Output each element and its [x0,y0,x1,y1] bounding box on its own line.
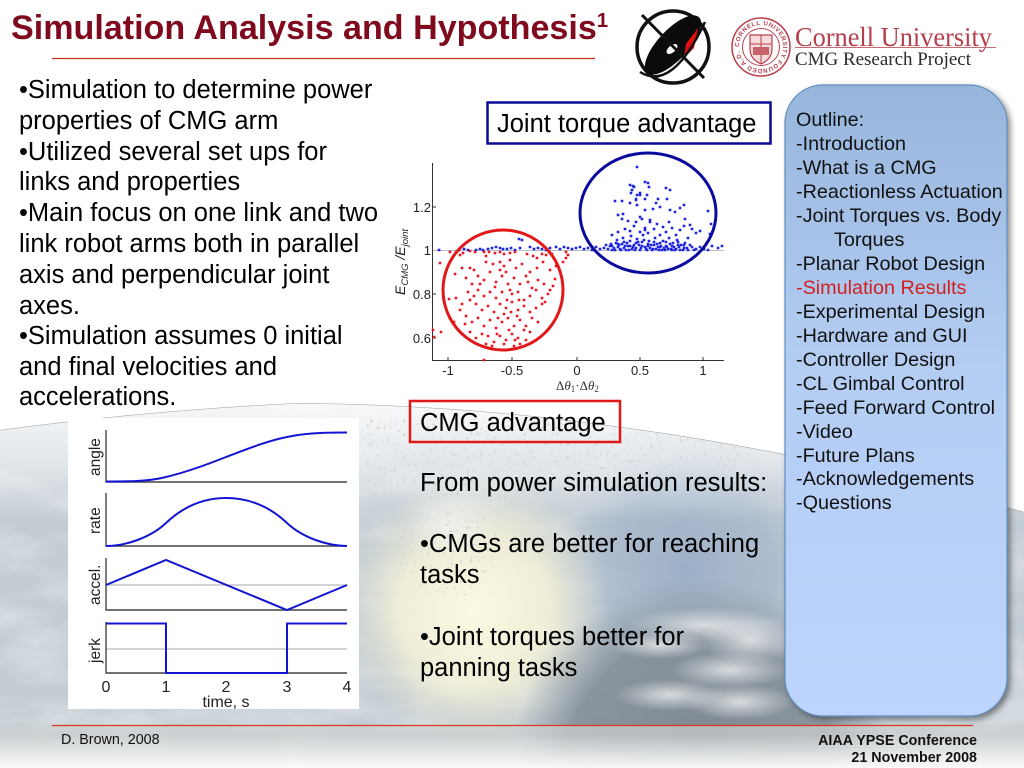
text block: simulation conclusions [420,469,767,682]
rate plot: rate [87,507,104,534]
chart axes: 0.6 [413,331,431,346]
panel: outline sidebar [785,85,1007,716]
outline list: -Future Plans [796,445,915,467]
outline list: -Controller Design [796,349,955,371]
chart axes: Δθ [556,378,571,393]
text block: simulation conclusions: •Joint torques better for [420,623,685,651]
text block: simulation bullet points [19,76,378,411]
chart axes: 0.5 [631,363,649,378]
text block: simulation bullet points: link robot arms both in parallel [19,230,359,258]
text block: simulation bullet points: links and properties [19,168,240,196]
outline list: -Feed Forward Control [796,397,995,419]
red highlight circle [443,230,563,350]
blue data points [439,167,722,250]
acceleration plot: accel. [87,564,104,605]
outline list: -Introduction [796,133,906,155]
text block: simulation conclusions: tasks [420,561,480,589]
logo text: Cornell University [795,21,996,70]
outline list: -Joint Torques vs. Body [796,205,1001,227]
chart axes: E [392,286,408,295]
time axis labels [102,679,352,711]
time axis labels: 0 [102,679,111,696]
outline list: -Simulation Results [796,277,967,299]
chart axes: 1 [424,243,431,258]
blue highlight circle [580,153,716,273]
angle plot: angle [87,438,104,476]
chart panel: angle, rate, accel, jerk versus time [68,418,359,711]
time axis labels: 3 [283,679,292,696]
chart axes: -1 [442,363,454,378]
rate plot [87,493,347,546]
red data points [433,251,568,360]
text block: simulation bullet points: accelerations. [19,383,176,411]
icon: Cornell University seal [731,17,791,77]
outline list: -What is a CMG [796,157,937,179]
text block: simulation conclusions: •CMGs are better for reaching [420,530,759,558]
text block: simulation bullet points: axis and perpendicular joint [19,261,329,289]
text block: simulation bullet points: •Simulation to determine power [19,76,373,104]
outline list: -Video [796,421,853,443]
outline list: -Reactionless Actuation [796,181,1003,203]
chart axes: 0 [573,363,581,378]
chart axes: -0.5 [501,363,523,378]
background: earth photograph [0,403,1024,768]
outline list [796,109,1003,514]
text block: simulation bullet points: and final velocities and [19,353,277,381]
scatter chart: energy ratio [392,153,724,394]
footer rule [52,724,973,726]
chart axes: 0.8 [413,287,431,302]
callout: CMG advantage: CMG advantage [420,409,606,437]
chart axes: joint [400,229,411,248]
text block: simulation bullet points: •Main focus on one link and two [19,199,378,227]
time axis labels: 1 [162,679,171,696]
outline list: Outline: [796,109,864,131]
chart axes [392,163,724,394]
outline list: -Acknowledgements [796,468,974,490]
outline list: Torques [834,229,904,251]
outline list: -Experimental Design [796,301,985,323]
chart axes: θ [588,378,595,393]
time axis labels: 4 [343,679,352,696]
text block: simulation bullet points: axes. [19,292,80,320]
outline list: -Hardware and GUI [796,325,968,347]
text block: simulation conclusions: panning tasks [420,654,577,682]
text block: simulation bullet points: •Utilized several set ups for [19,138,327,166]
time axis labels: time, s [202,694,250,711]
time axis labels: 2 [222,679,231,696]
text block: simulation bullet points: •Simulation assumes 0 initial [19,322,343,350]
outline list: -Questions [796,492,892,514]
outline list: -Planar Robot Design [796,253,985,275]
logo text: Cornell University: Cornell University [795,21,992,52]
callout: joint torque advantage: Joint torque advantage [497,110,756,138]
chart axes: 2 [594,384,599,394]
jerk plot: jerk [87,638,104,664]
angle plot [87,430,347,482]
footer: conference and date [818,733,977,766]
chart axes: ·Δ [575,378,588,393]
text block: simulation conclusions: From power simulation results: [420,469,767,497]
chart axes: 1.2 [413,200,431,215]
jerk plot [87,622,347,673]
logo text: Cornell University: CMG Research Project [795,49,972,70]
title: Simulation Analysis and Hypothesis [11,9,597,47]
callout: CMG advantage [410,401,620,442]
text block: simulation bullet points: properties of CMG arm [19,107,278,135]
icon: CMG gyroscope logo [636,7,710,83]
title: 1 [597,9,608,32]
footer: conference and date: 21 November 2008 [851,750,977,766]
acceleration plot [87,558,347,610]
chart axes: 1 [571,384,575,394]
chart axes: /E [392,246,408,263]
chart axes: CMG [400,263,411,286]
outline list: -CL Gimbal Control [796,373,965,395]
footer: author: D. Brown, 2008 [61,732,160,748]
chart axes: 1 [699,363,707,378]
footer: conference and date: AIAA YPSE Conference [818,733,977,749]
callout: joint torque advantage [488,102,770,144]
